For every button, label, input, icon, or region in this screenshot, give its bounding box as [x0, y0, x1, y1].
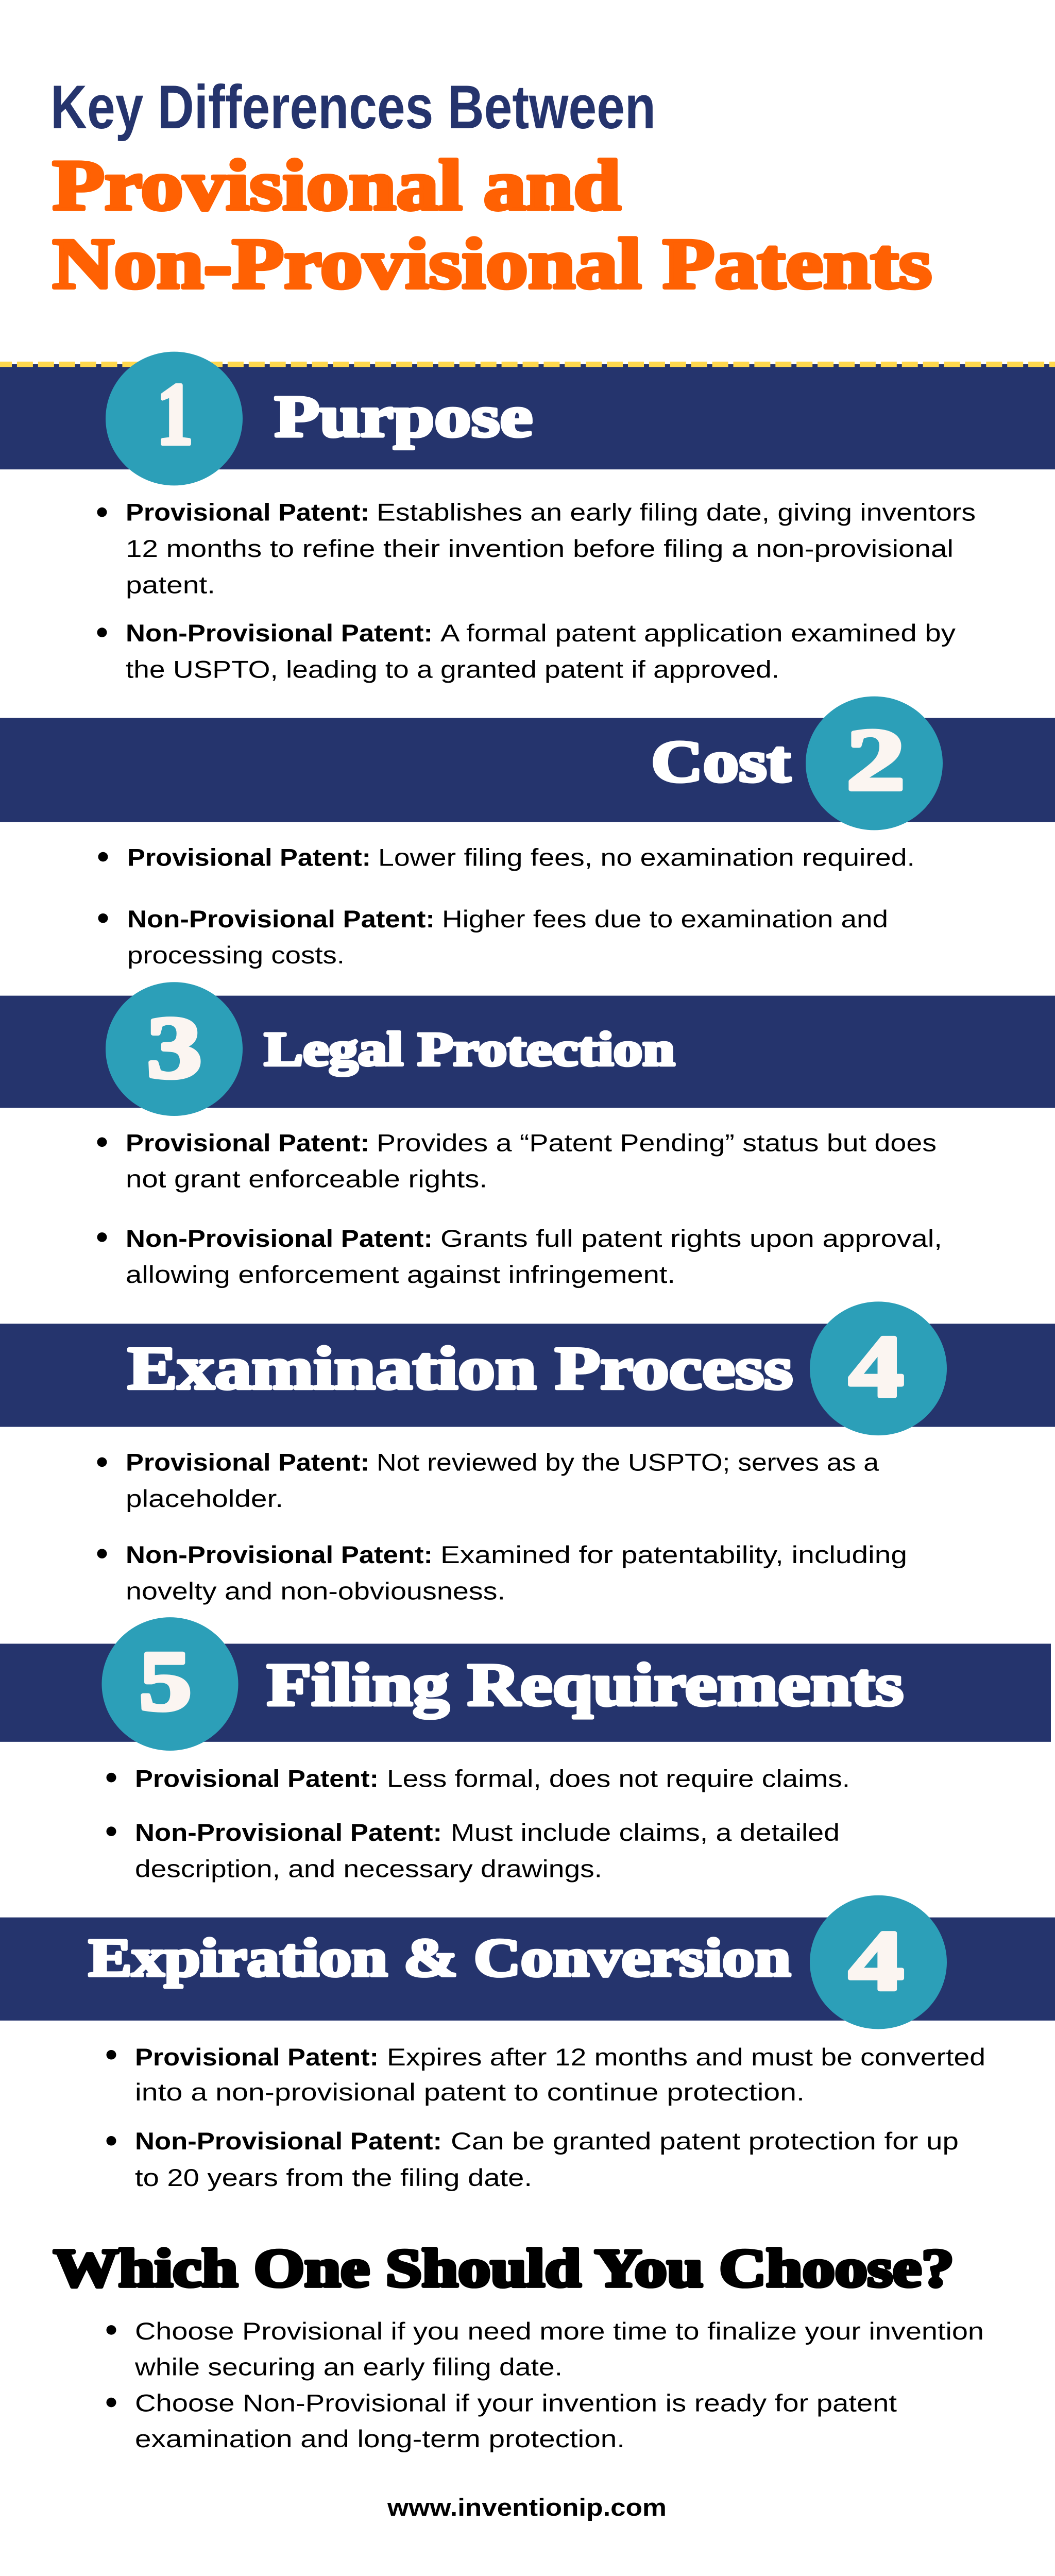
bullet: provisional patent: patent.	[126, 572, 215, 599]
bullet: provisional patent	[97, 499, 976, 599]
section banner: expiration and conversion	[0, 1918, 1055, 2021]
number badge 2	[806, 697, 943, 830]
heading: examination process: Examination Process	[128, 1334, 793, 1402]
number badge 2: 2	[846, 710, 905, 809]
section banner: legal protection	[0, 996, 1055, 1108]
footer website: www.inventionip.com	[387, 2494, 667, 2521]
bullet: provisional patent: Provisional Patent:	[126, 499, 369, 527]
bullet: provisional patent: Establishes an early filing date, giving inventors	[377, 499, 976, 527]
bullet: provisional patent: Not reviewed by the USPTO; serves as a	[377, 1449, 879, 1476]
title line: provisional and: Provisional and	[53, 145, 621, 225]
bullet: provisional patent: Provisional Patent:	[126, 1449, 369, 1476]
bullet: provisional patent	[106, 2044, 985, 2106]
heading: expiration and conversion: Expiration & Conversion	[89, 1928, 791, 1988]
number badge 4	[810, 1301, 947, 1435]
number badge 5: 5	[139, 1634, 192, 1728]
bullet: non-provisional patent: Non-Provisional Patent:	[126, 620, 433, 647]
title line: non-provisional patents: Non-Provisional Patents	[53, 224, 932, 303]
bullet: provisional patent: Provides a “Patent Pending” status but does	[377, 1130, 937, 1157]
heading: filing requirements: Filing Requirements	[267, 1651, 904, 1718]
bullet: non-provisional patent	[98, 906, 888, 969]
bullet: non-provisional patent: Non-Provisional Patent:	[126, 1225, 433, 1252]
number badge 1	[106, 352, 243, 485]
title block	[50, 72, 932, 303]
bullet: provisional patent: 12 months to refine their invention before filing a non-provisional	[126, 536, 954, 563]
bullet: provisional patent: into a non-provisional patent to continue protection.	[135, 2079, 805, 2106]
bullet: non-provisional patent	[106, 1820, 840, 1883]
bullet: provisional patent: placeholder.	[126, 1485, 283, 1513]
section banner: purpose	[0, 364, 1055, 469]
bullet: choose non-provisional	[106, 2390, 897, 2453]
bullet: provisional patent	[97, 1130, 937, 1193]
bullet: choose provisional: Choose Provisional if you need more time to finalize your invention	[135, 2318, 984, 2345]
bullet: provisional patent: Provisional Patent:	[127, 844, 371, 872]
number badge 4: 4	[849, 1913, 904, 2008]
bullet: choose non-provisional: Choose Non-Provisional if your invention is ready for patent	[135, 2390, 897, 2417]
number badge 3	[106, 982, 243, 1116]
bullet: provisional patent: not grant enforceable rights.	[126, 1166, 487, 1193]
heading: cost: Cost	[651, 729, 791, 794]
number badge 5	[102, 1617, 238, 1751]
bullet: provisional patent	[97, 1449, 879, 1513]
bullet: provisional patent: Expires after 12 months and must be converted	[387, 2044, 985, 2071]
bullet: non-provisional patent: A formal patent application examined by	[440, 620, 956, 647]
section banner: cost	[0, 718, 1055, 822]
section banner: examination process	[0, 1324, 1055, 1427]
bullet: non-provisional patent: the USPTO, leading to a granted patent if approved.	[126, 656, 779, 683]
bullet: non-provisional patent: allowing enforcement against infringement.	[126, 1262, 675, 1289]
bullet: non-provisional patent: Grants full patent rights upon approval,	[440, 1225, 942, 1252]
section banner: filing requirements	[0, 1643, 1051, 1742]
bullet: non-provisional patent: Non-Provisional Patent:	[135, 2128, 442, 2155]
bullet: provisional patent: Provisional Patent:	[135, 1766, 379, 1793]
number badge 4: 4	[849, 1317, 904, 1416]
panel: expiration and conversion	[0, 1895, 1055, 2192]
heading: legal protection: Legal Protection	[264, 1023, 675, 1076]
bullet: non-provisional patent: Non-Provisional Patent:	[126, 1542, 433, 1569]
panel: cost	[0, 697, 1055, 969]
bullet: choose provisional	[106, 2318, 984, 2381]
number badge 3: 3	[147, 998, 202, 1096]
bullet: choose provisional: while securing an early filing date.	[134, 2354, 563, 2381]
heading: which one should you choose: Which One Should You Choose?	[54, 2239, 954, 2298]
panel: filing requirements	[0, 1617, 1051, 1883]
bullet: non-provisional patent	[97, 1542, 907, 1605]
bullet: non-provisional patent: novelty and non-obviousness.	[126, 1578, 505, 1605]
number badge 1: 1	[157, 365, 193, 463]
title line: key differences between: Key Differences Between	[50, 72, 656, 142]
number badge 4	[810, 1895, 947, 2029]
panel: which one should you choose	[54, 2239, 984, 2453]
bullet: non-provisional patent: to 20 years from the filing date.	[135, 2165, 532, 2192]
bullet: provisional patent: Provisional Patent:	[126, 1130, 369, 1157]
bullet: non-provisional patent: Non-Provisional Patent:	[135, 1820, 442, 1846]
bullet: non-provisional patent	[97, 1225, 942, 1289]
bullet: non-provisional patent: Can be granted patent protection for up	[451, 2128, 959, 2155]
bullet: provisional patent: Lower filing fees, no examination required.	[378, 844, 915, 872]
bullet: non-provisional patent: description, and necessary drawings.	[135, 1856, 602, 1883]
bullet: non-provisional patent	[97, 620, 956, 683]
panel: examination process	[0, 1301, 1055, 1605]
bullet: provisional patent	[106, 1766, 850, 1793]
heading: purpose: Purpose	[275, 384, 533, 449]
panel: purpose	[0, 352, 1055, 683]
bullet: non-provisional patent: Examined for patentability, including	[440, 1542, 907, 1569]
bullet: non-provisional patent: processing costs.	[127, 942, 345, 969]
bullet: choose non-provisional: examination and long-term protection.	[135, 2426, 625, 2453]
bullet: non-provisional patent: Must include claims, a detailed	[451, 1820, 840, 1846]
bullet: provisional patent: Provisional Patent:	[135, 2044, 379, 2071]
bullet: provisional patent	[98, 844, 915, 872]
panel: legal protection	[0, 982, 1055, 1289]
bullet: non-provisional patent: Non-Provisional Patent:	[127, 906, 435, 933]
bullet: provisional patent: Less formal, does not require claims.	[387, 1766, 850, 1793]
bullet: non-provisional patent: Higher fees due to examination and	[442, 906, 888, 933]
bullet: non-provisional patent	[106, 2128, 959, 2192]
